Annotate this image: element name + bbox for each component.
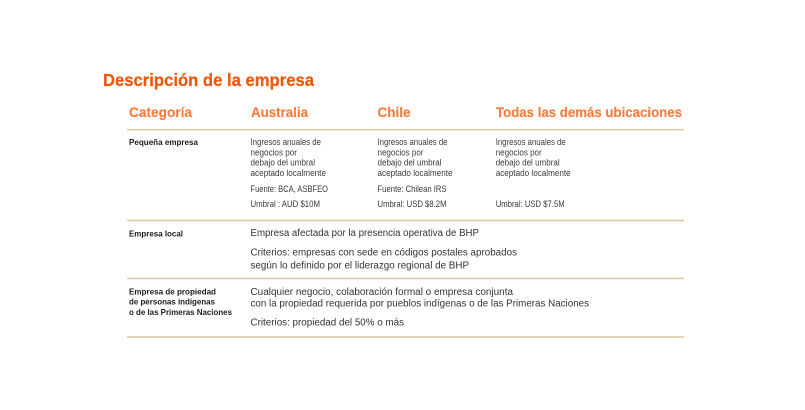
cell: otras ubicaciones: Ingresos anuales de (496, 137, 566, 147)
cell: Chile (378, 137, 453, 209)
row: empresa de propiedad indígena: o de las Primeras Naciones (129, 308, 232, 317)
cell: Chile: Fuente: Chilean IRS (378, 184, 447, 194)
table header row: Chile (378, 104, 411, 120)
row: empresa local: Empresa local (129, 230, 183, 238)
row: empresa local (129, 228, 517, 272)
cell: Australia: Ingresos anuales de (250, 137, 321, 147)
cell: otras ubicaciones: debajo del umbral (496, 158, 560, 168)
row: empresa de propiedad indígena: Empresa de propiedad (129, 287, 216, 296)
cell: otras ubicaciones: Umbral: USD $7.5M (496, 199, 565, 209)
row: empresa de propiedad indígena: con la propiedad requerida por pueblos indígenas o de las Primeras Naciones (250, 299, 589, 310)
cell: Australia: debajo del umbral (250, 158, 315, 168)
cell: otras ubicaciones (496, 137, 571, 209)
cell: Australia: Umbral : AUD $10M (250, 199, 320, 209)
cell: Australia: aceptado localmente (250, 168, 326, 178)
cell: Chile: Ingresos anuales de (378, 137, 448, 147)
row: empresa local: Empresa afectada por la presencia operativa de BHP (250, 228, 479, 239)
row: empresa de propiedad indígena (129, 287, 589, 329)
table header row: Todas las demás ubicaciones (496, 104, 682, 120)
row: pequeña empresa: Pequeña empresa (129, 138, 198, 147)
cell: otras ubicaciones: aceptado localmente (496, 168, 571, 178)
title: Descripción de la empresa (103, 70, 314, 90)
table (127, 104, 684, 337)
table header row (129, 104, 682, 120)
cell: Australia (250, 137, 328, 209)
row: empresa de propiedad indígena: Cualquier negocio, colaboración formal o empresa conjunta (250, 287, 514, 298)
cell: otras ubicaciones: negocios por (496, 147, 542, 157)
cell: Australia: Fuente: BCA, ASBFEO (250, 184, 328, 194)
row: empresa local: según lo definido por el liderazgo regional de BHP (250, 260, 469, 272)
cell: Chile: Umbral: USD $8.2M (378, 199, 446, 209)
cell: Chile: debajo del umbral (378, 158, 442, 168)
cell: Chile: aceptado localmente (378, 168, 453, 178)
row: empresa de propiedad indígena: de personas indígenas (129, 298, 215, 306)
table header row: Categoría (129, 104, 192, 120)
cell: Australia: negocios por (250, 147, 297, 157)
table header row: Australia (251, 104, 308, 120)
row: pequeña empresa (129, 137, 571, 209)
cell: Chile: negocios por (378, 147, 424, 157)
row: empresa de propiedad indígena: Criterios: propiedad del 50% o más (250, 318, 404, 329)
row: empresa local: Criterios: empresas con sede en códigos postales aprobados (250, 248, 517, 259)
